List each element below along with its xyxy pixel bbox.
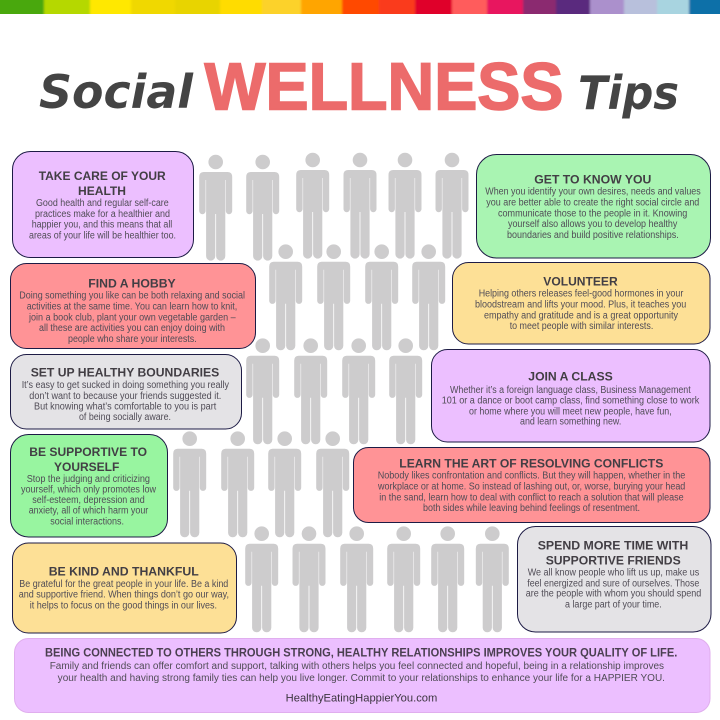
heading: join a class: JOIN A CLASS — [528, 370, 613, 384]
text: spend more time with supportive friends: are the people with whom you should spend — [526, 589, 701, 600]
panel: volunteer — [452, 262, 710, 344]
heading: spend more time with supportive friends — [538, 539, 688, 568]
text: learn the art of resolving conflicts: Nobody likes confrontation and conflicts. But they will happen, whether in the — [378, 471, 685, 482]
heading: take care of your health: HEALTH — [78, 184, 126, 198]
text: take care of your health: practices make for a healthier and — [35, 209, 170, 220]
heading: spend more time with supportive friends: SUPPORTIVE FRIENDS — [546, 554, 681, 568]
text: be kind and thankful — [19, 579, 229, 612]
text: set up healthy boundaries: of being socially aware. — [79, 412, 171, 423]
text: get to know you: yourself also allows you to develop healthy — [508, 219, 677, 230]
text: volunteer: Helping others releases feel-good hormones in your — [479, 289, 684, 300]
text: get to know you: you are better able to create the right social circle and — [486, 198, 699, 209]
website url: HealthyEatingHappierYou.com — [286, 693, 437, 705]
text: be supportive to yourself: Stop the judging and criticizing — [27, 474, 150, 485]
panel: get to know you — [476, 154, 710, 258]
text: learn the art of resolving conflicts: in the sand, learn how to deal with conflict to reach a solution that will please — [379, 493, 684, 504]
text: take care of your health: Good health and regular self-care — [36, 198, 169, 209]
crowd of grey people icons — [173, 153, 509, 632]
text: find a hobby: activities at the same time. You can learn how to knit, — [27, 302, 237, 313]
title word: Tips: Tips — [578, 66, 679, 120]
text: join a class: and learn something new. — [520, 416, 621, 427]
heading: be supportive to yourself — [29, 445, 147, 474]
heading: find a hobby: FIND A HOBBY — [88, 276, 176, 290]
text: be kind and thankful: it helps to focus on the good things in our lives. — [30, 601, 217, 612]
text: find a hobby: Doing something you like can be both relaxing and social — [19, 291, 245, 302]
text: get to know you — [485, 187, 701, 241]
panel: be kind and thankful — [12, 543, 236, 633]
text: be supportive to yourself: anxiety, all of which harm your — [29, 506, 149, 517]
people row 2 — [269, 244, 445, 350]
title — [39, 50, 679, 124]
text: learn the art of resolving conflicts: workplace or at home. So instead of lashing out, or, worse, burying your head — [377, 482, 685, 493]
text: join a class — [442, 385, 699, 427]
text: be supportive to yourself: social interactions. — [50, 516, 124, 527]
text: spend more time with supportive friends — [526, 568, 701, 611]
panel: spend more time with supportive friends — [518, 526, 711, 632]
text: be kind and thankful: and supportive friend. When things don’t go our way, — [19, 590, 229, 601]
text: spend more time with supportive friends: We all know people who lift us up, make us — [528, 568, 699, 579]
text: quality of life: Family and friends can offer comfort and support, talking with others helps you feel connected and hopeful, being in a relationship improves — [50, 661, 664, 672]
heading: take care of your health — [39, 169, 166, 198]
panel: learn the art of resolving conflicts — [354, 448, 710, 522]
text: volunteer: empathy and gratitude and is a great opportunity — [484, 311, 678, 322]
text: take care of your health: areas of your life will be healthier too. — [29, 230, 176, 241]
text: find a hobby: all these are activities you can enjoy doing with — [39, 323, 225, 334]
text: join a class: Whether it’s a foreign language class, Business Management — [450, 385, 691, 396]
heading: be kind and thankful: BE KIND AND THANKFUL — [49, 565, 199, 579]
text: quality of life — [50, 661, 665, 684]
heading: take care of your health: TAKE CARE OF YOUR — [39, 169, 166, 183]
text: be supportive to yourself: self-esteem, depression and — [32, 495, 145, 506]
people row 4 — [173, 431, 349, 537]
text: get to know you: communicate those to the people in it. Knowing — [498, 209, 687, 220]
panel: be supportive to yourself — [10, 434, 168, 537]
heading: volunteer: VOLUNTEER — [543, 274, 618, 288]
title word: WELLNESS: WELLNESS — [204, 50, 564, 124]
text: volunteer: to meet people with similar interests. — [510, 321, 653, 332]
text: find a hobby: people who share your interests. — [68, 334, 197, 345]
text: learn the art of resolving conflicts — [377, 471, 685, 514]
panel: quality of life summary — [14, 638, 710, 712]
text: take care of your health: happier you, and this means that all — [32, 220, 172, 230]
panel: find a hobby — [10, 264, 256, 348]
people row 1 — [199, 153, 468, 261]
text: set up healthy boundaries: don’t want to because your friends suggested it. — [29, 391, 221, 402]
text: set up healthy boundaries: It’s easy to get sucked in doing something you really — [22, 380, 229, 391]
text: spend more time with supportive friends: feel energized and sure of ourselves. Those — [527, 579, 699, 590]
rainbow colour strip — [0, 0, 720, 14]
text: spend more time with supportive friends: a large part of your time. — [565, 600, 662, 611]
text: quality of life: your health and having strong family ties can help you live longer. Commit to your relationships to enhance your life for a HAPPIER YOU. — [58, 673, 665, 684]
heading: get to know you: GET TO KNOW YOU — [534, 173, 651, 187]
heading: set up healthy boundaries: SET UP HEALTHY BOUNDARIES — [31, 366, 219, 380]
heading: be supportive to yourself: YOURSELF — [54, 460, 120, 474]
text: set up healthy boundaries: But knowing what’s comfortable to you is part — [34, 402, 217, 413]
text: learn the art of resolving conflicts: both sides while leaving behind feelings of resentment. — [423, 503, 640, 514]
panel: set up healthy boundaries — [10, 354, 242, 429]
text: find a hobby — [19, 291, 245, 345]
heading: learn the art of resolving conflicts: LEARN THE ART OF RESOLVING CONFLICTS — [399, 457, 663, 471]
panel: join a class — [432, 350, 710, 442]
panel: take care of your health — [12, 152, 194, 258]
text: join a class: 101 or a dance or boot camp class, find something close to work — [442, 395, 699, 406]
heading: spend more time with supportive friends: SPEND MORE TIME WITH — [538, 539, 688, 553]
people row 5 — [245, 526, 509, 632]
heading: quality of life: BEING CONNECTED TO OTHERS THROUGH STRONG, HEALTHY RELATIONSHIPS IMPROVES YOUR QUALITY OF LIFE. — [45, 648, 677, 660]
title word: Social: Social — [39, 65, 194, 119]
text: be supportive to yourself: yourself, which only promotes low — [21, 485, 157, 496]
text: join a class: or home where you will meet new people, have fun, — [469, 406, 672, 417]
text: find a hobby: join a book club, plant your own vegetable garden – — [28, 313, 236, 324]
people row 3 — [246, 338, 422, 444]
text: set up healthy boundaries — [22, 380, 229, 423]
text: volunteer: bloodstream and lifts your mood. Plus, it teaches you — [475, 300, 686, 311]
text: volunteer — [475, 289, 686, 332]
text: take care of your health — [29, 198, 176, 241]
heading: be supportive to yourself: BE SUPPORTIVE TO — [29, 445, 147, 459]
text: be supportive to yourself — [21, 474, 157, 527]
text: get to know you: boundaries and build positive relationships. — [507, 230, 679, 241]
text: be kind and thankful: Be grateful for the great people in your life. Be a kind — [19, 579, 228, 590]
text: get to know you: When you identify your own desires, needs and values — [485, 187, 701, 198]
